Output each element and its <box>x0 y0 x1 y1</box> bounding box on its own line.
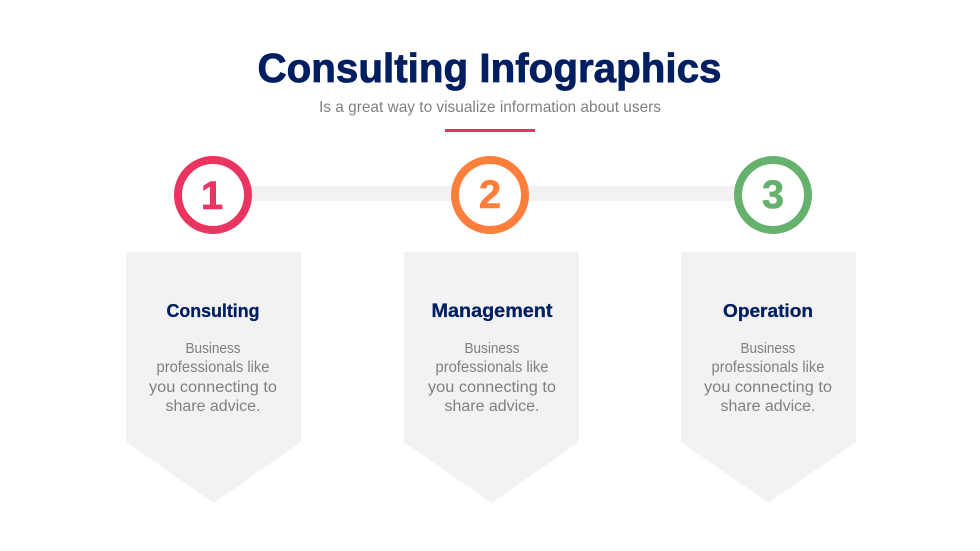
step 1 badge <box>178 160 248 230</box>
body text: management: you connecting to <box>428 379 556 396</box>
heading: management: Management <box>432 300 553 322</box>
panel: consulting <box>126 252 301 503</box>
body text: management: Business <box>464 340 520 357</box>
panel: management <box>404 252 579 503</box>
header <box>258 45 722 132</box>
step 3 badge: 3 <box>762 173 784 217</box>
body text: consulting: Business <box>186 340 240 357</box>
body text: consulting: you connecting to <box>149 379 277 396</box>
step 2 badge: 2 <box>479 173 501 217</box>
title: Consulting Infographics <box>258 45 722 91</box>
connector bar <box>250 186 735 201</box>
body text: operation: professionals like <box>712 359 824 376</box>
body text: consulting <box>149 340 277 415</box>
heading: consulting: Consulting <box>166 300 260 321</box>
body text: operation: Business <box>740 340 796 357</box>
body text: consulting: professionals like <box>156 359 270 376</box>
step 1 badge: 1 <box>201 174 223 218</box>
panel: operation <box>681 252 856 503</box>
body text: operation <box>704 340 832 415</box>
step 3 badge <box>738 160 808 230</box>
subtitle: Is a great way to visualize information about users <box>319 99 661 116</box>
step 2 badge <box>455 160 525 230</box>
body text: management: share advice. <box>444 398 540 415</box>
body text: operation: you connecting to <box>704 379 832 396</box>
heading: operation: Operation <box>723 300 813 321</box>
accent underline <box>445 129 535 132</box>
body text: operation: share advice. <box>720 398 816 415</box>
body text: management <box>428 340 556 415</box>
body text: consulting: share advice. <box>166 398 260 415</box>
body text: management: professionals like <box>436 359 548 376</box>
